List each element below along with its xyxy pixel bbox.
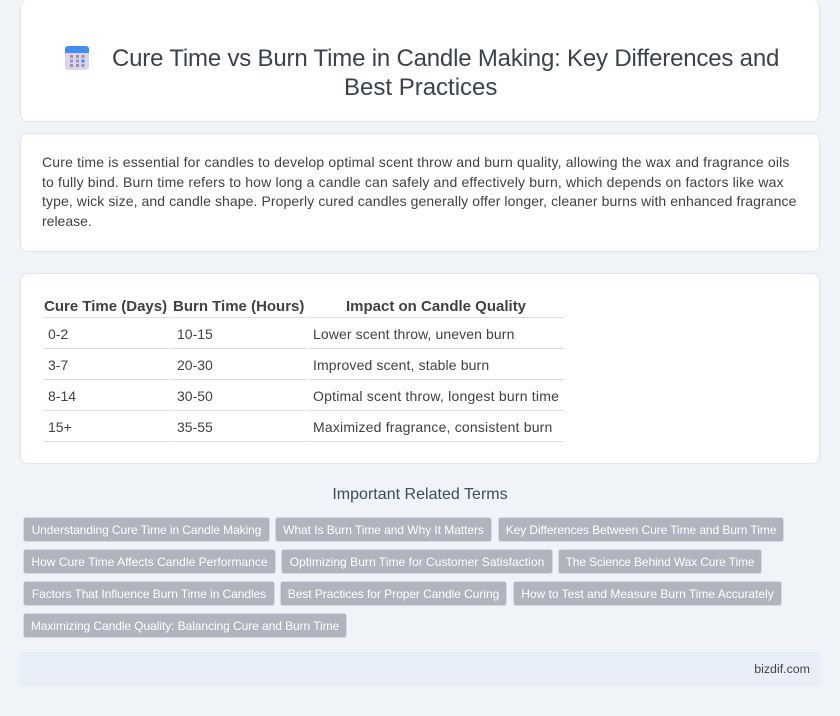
panel: title header: Best Practices <box>344 74 497 101</box>
tag: What Is Burn Time and Why It Matters <box>283 523 484 537</box>
table header: Impact on Candle Quality <box>346 298 526 315</box>
panel: title header: Cure Time vs Burn Time in Candle Making: Key Differences and <box>112 45 779 72</box>
text block: introduction: type, wick size, and candle shape. Properly cured candles generally offer longer, cleaner burns with enhanced fragrance <box>42 193 796 209</box>
table row: 0-2: 10-15 <box>177 326 213 342</box>
table row: 0-2: 0-2 <box>48 326 68 342</box>
text block: introduction: release. <box>42 213 92 229</box>
heading: important related terms: Important Related Terms <box>332 486 508 503</box>
tag: Key Differences Between Cure Time and Burn Time <box>506 523 776 537</box>
tag <box>558 549 762 574</box>
table row: 0-2: Lower scent throw, uneven burn <box>313 326 514 342</box>
tag: The Science Behind Wax Cure Time <box>566 555 754 569</box>
table row: 15+: 15+ <box>48 419 72 435</box>
text block: introduction <box>42 154 796 229</box>
tag: Understanding Cure Time in Candle Making <box>32 523 261 537</box>
text block: introduction: Cure time is essential for candles to develop optimal scent throw and burn quality, allowing the wax and fragrance oils <box>42 154 790 170</box>
icon: calendar <box>65 46 89 70</box>
tag <box>498 517 784 542</box>
tag <box>281 549 553 574</box>
tag: Best Practices for Proper Candle Curing <box>288 587 499 601</box>
tag <box>513 581 782 606</box>
table row: 3-7: 3-7 <box>48 357 68 373</box>
footer credit: bizdif.com <box>754 662 810 676</box>
table header: Burn Time (Hours) <box>173 298 304 315</box>
related terms tags <box>23 517 784 638</box>
tag <box>23 581 275 606</box>
table row: 8-14: 8-14 <box>48 388 76 404</box>
table row: 15+ <box>43 419 564 442</box>
tag: How Cure Time Affects Candle Performance <box>31 555 268 569</box>
tag <box>23 613 347 638</box>
footer bar <box>20 652 820 686</box>
tag <box>23 549 276 574</box>
table row: 8-14 <box>43 388 564 411</box>
table row: 3-7 <box>43 357 564 380</box>
table row: 8-14: 30-50 <box>177 388 213 404</box>
panel: title header <box>20 0 820 122</box>
tag: How to Test and Measure Burn Time Accurately <box>521 587 774 601</box>
table header <box>43 298 564 318</box>
tag <box>23 517 270 542</box>
table row: 15+: 35-55 <box>177 419 213 435</box>
panel: comparison table <box>20 273 820 464</box>
table row: 15+: Maximized fragrance, consistent burn <box>313 419 553 435</box>
table row: 0-2 <box>43 326 564 349</box>
tag: Optimizing Burn Time for Customer Satisfaction <box>290 555 544 569</box>
table row: 3-7: 20-30 <box>177 357 213 373</box>
title <box>112 45 779 101</box>
panel: introduction text <box>20 133 820 252</box>
tag: Factors That Influence Burn Time in Candles <box>32 587 266 601</box>
table row: 8-14: Optimal scent throw, longest burn time <box>313 388 559 404</box>
tag <box>280 581 507 606</box>
text block: introduction: to fully bind. Burn time refers to how long a candle can safely and effectively burn, which depends on factors like wax <box>42 174 784 190</box>
tag: Maximizing Candle Quality: Balancing Cure and Burn Time <box>31 619 339 633</box>
table header: Cure Time (Days) <box>44 298 167 315</box>
table row: 3-7: Improved scent, stable burn <box>313 357 489 373</box>
tag <box>275 517 492 542</box>
